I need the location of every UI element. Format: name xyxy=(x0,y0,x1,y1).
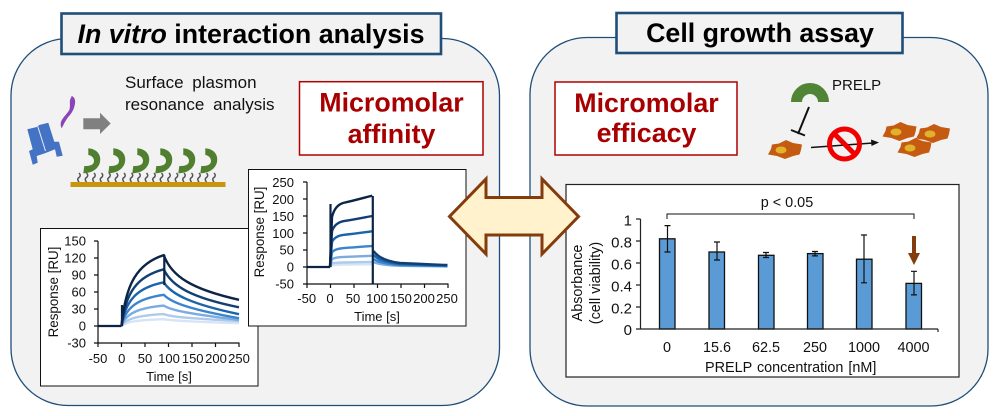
text: surface plasmon resonance analysis: resonance analysis xyxy=(125,95,275,114)
icon: sensor surface with immobilized PRELP xyxy=(70,148,226,187)
chart: cell viability bar chart: 0.8 xyxy=(611,234,632,252)
axes xyxy=(94,241,240,347)
callout: micromolar efficacy: Micromolar xyxy=(574,88,719,118)
chart: SPR sensorgram, upper center: 250 xyxy=(272,175,294,190)
chart: cell viability bar chart: 250 xyxy=(803,340,827,356)
icon: blue receptor xyxy=(27,123,63,165)
curves xyxy=(307,196,448,284)
chart: SPR sensorgram, lower left: -30 xyxy=(67,336,86,350)
significance bracket xyxy=(667,214,914,219)
chart: SPR sensorgram, lower left: Response [RU] xyxy=(46,247,61,337)
brown arrow xyxy=(908,236,920,265)
panel: cell growth assay xyxy=(530,38,988,406)
chart: cell viability bar chart: Absorbance xyxy=(570,245,586,321)
bars xyxy=(660,239,922,329)
chart: SPR sensorgram, lower left: 200 xyxy=(205,351,227,366)
chart: SPR sensorgram, lower left: 0 xyxy=(79,318,86,334)
icon: PRELP inhibits cell growth: PRELP xyxy=(832,77,881,94)
icon: gray arrow xyxy=(83,113,111,134)
axes xyxy=(303,182,448,288)
chart: SPR sensorgram, upper center: 100 xyxy=(366,291,388,306)
chart: SPR sensorgram, lower left: 0 xyxy=(118,351,125,366)
callout: micromolar affinity: affinity xyxy=(348,119,436,149)
chart: cell viability bar chart: p < 0.05 xyxy=(761,195,813,211)
chart: SPR sensorgram, lower left: 90 xyxy=(72,268,86,282)
chart: cell viability bar chart: 0.4 xyxy=(611,278,632,296)
chart: cell viability bar chart: 1000 xyxy=(848,340,880,356)
chart: cell viability bar chart: 0 xyxy=(663,340,671,356)
chart: SPR sensorgram, upper center: 50 xyxy=(346,291,360,306)
heading: in vitro interaction analysis xyxy=(62,14,441,54)
chart: SPR sensorgram, upper center: 0 xyxy=(287,260,294,274)
chart: SPR sensorgram, upper center: 100 xyxy=(272,226,294,241)
icon: PRELP inhibits cell growth xyxy=(768,77,950,159)
chart: SPR sensorgram, lower left: 150 xyxy=(182,351,204,366)
icon: purple peptide xyxy=(61,96,75,128)
chart: cell viability bar chart: 0 xyxy=(624,322,632,339)
chart: cell viability bar chart: 62.5 xyxy=(752,340,780,356)
chart: cell viability bar chart xyxy=(566,184,959,377)
callout: micromolar efficacy: efficacy xyxy=(597,118,696,148)
chart: cell viability bar chart: 15.6 xyxy=(703,340,731,356)
chart: SPR sensorgram, upper center: Response [RU] xyxy=(252,187,267,277)
chart: SPR sensorgram, upper center: 250 xyxy=(436,291,458,306)
chart: SPR sensorgram, lower left: 30 xyxy=(72,302,86,316)
chart: SPR sensorgram, lower left: 50 xyxy=(138,351,152,366)
chart: SPR sensorgram, lower left: 100 xyxy=(158,351,180,366)
callout: micromolar affinity xyxy=(300,82,483,155)
chart: cell viability bar chart: 1 xyxy=(624,212,632,230)
heading: cell growth assay xyxy=(616,13,902,53)
chart: cell viability bar chart: (cell viability) xyxy=(588,242,604,324)
chart: SPR sensorgram, upper center: -50 xyxy=(297,291,316,306)
chart: SPR sensorgram, upper center: 50 xyxy=(280,242,294,258)
chart: SPR sensorgram, upper center xyxy=(248,170,466,326)
heading: cell growth assay: Cell growth assay xyxy=(646,18,874,48)
double arrow between panels xyxy=(450,179,578,254)
chart: SPR sensorgram, upper center: 0 xyxy=(326,291,334,306)
chart: cell viability bar chart: PRELP concentration [nM] xyxy=(705,360,876,376)
panel: in vitro interaction analysis xyxy=(11,38,500,406)
chart: SPR sensorgram, lower left xyxy=(40,228,258,386)
chart: SPR sensorgram, upper center: 200 xyxy=(272,192,294,207)
callout: micromolar efficacy xyxy=(555,82,737,155)
chart: SPR sensorgram, upper center: 150 xyxy=(390,291,412,306)
callout: micromolar affinity: Micromolar xyxy=(319,88,464,118)
chart: SPR sensorgram, lower left: 120 xyxy=(64,250,86,266)
heading: in vitro interaction analysis: In vitro interaction analysis xyxy=(78,19,424,49)
chart: cell viability bar chart: 0.6 xyxy=(611,256,632,274)
chart: SPR sensorgram, lower left: 60 xyxy=(72,284,86,300)
chart: SPR sensorgram, lower left: -50 xyxy=(89,351,107,366)
error bars xyxy=(664,226,917,295)
chart: SPR sensorgram, lower left: 150 xyxy=(64,234,86,248)
chart: SPR sensorgram, upper center: 150 xyxy=(272,209,294,224)
chart: SPR sensorgram, upper center: 200 xyxy=(413,291,435,306)
text: surface plasmon resonance analysis: Surface plasmon xyxy=(125,73,257,92)
chart: SPR sensorgram, lower left: 250 xyxy=(228,351,250,366)
chart: cell viability bar chart: 0.2 xyxy=(611,300,632,318)
axes xyxy=(636,219,938,332)
curves xyxy=(98,255,239,326)
chart: SPR sensorgram, upper center: Time [s] xyxy=(354,309,400,324)
chart: cell viability bar chart: 4000 xyxy=(897,340,930,356)
chart: SPR sensorgram, upper center: -50 xyxy=(275,276,294,292)
chart: SPR sensorgram, lower left: Time [s] xyxy=(146,369,192,384)
